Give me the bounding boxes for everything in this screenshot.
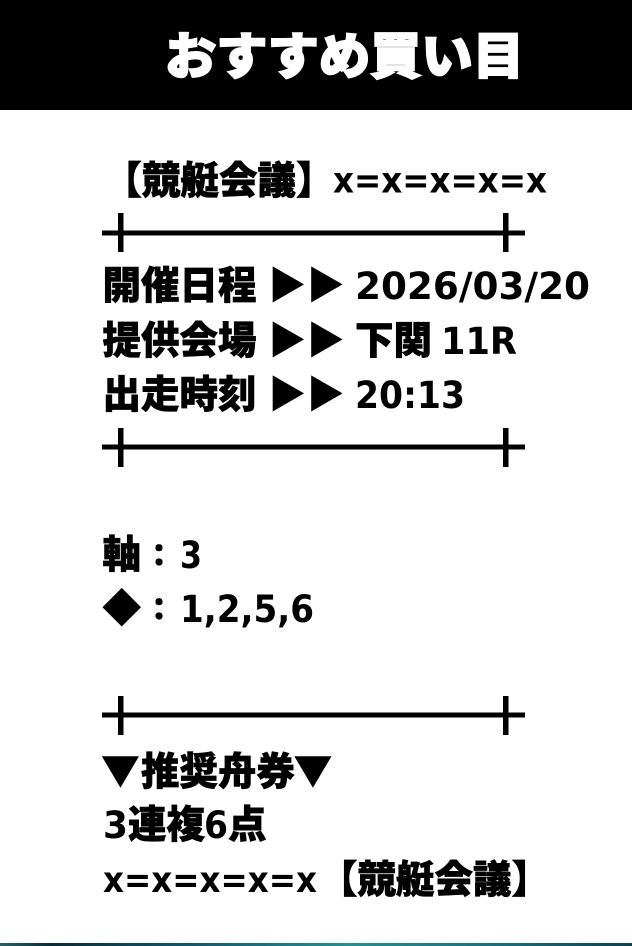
- divider 1: [102, 213, 525, 252]
- race date row: ▶▶: [268, 265, 345, 308]
- axis boat: ：: [144, 540, 174, 573]
- divider 2: [102, 428, 525, 467]
- venue row: 提供会場: [102, 320, 257, 363]
- partner boats: [102, 588, 314, 631]
- race date row: 開催日程: [102, 265, 257, 308]
- ticket count: 6: [204, 804, 228, 847]
- venue row: 11R: [441, 320, 517, 363]
- race date row: [102, 265, 590, 308]
- heading: brand line: x=x=x=x=x: [333, 160, 547, 202]
- partner boats: 1,2,5,6: [180, 588, 314, 631]
- ticket count: 点: [228, 804, 267, 847]
- heading: brand line: 【競艇会議】: [104, 160, 335, 203]
- footer brand line: [103, 859, 550, 902]
- start time row: ▶▶: [268, 374, 345, 417]
- recommended tickets heading: [89, 739, 344, 799]
- axis boat: 軸: [102, 534, 141, 577]
- recommended tickets heading: ▼: [89, 739, 152, 799]
- recommended tickets heading: ▼: [282, 739, 344, 799]
- ticket count: 連複: [128, 804, 206, 847]
- venue row: 下関: [355, 320, 432, 363]
- divider 3: [102, 696, 525, 735]
- start time row: 出走時刻: [102, 374, 257, 417]
- venue row: [102, 320, 517, 363]
- recommended tickets heading: 推奨舟券: [141, 751, 295, 794]
- header banner: [0, 0, 632, 110]
- ticket count: [103, 804, 267, 847]
- axis boat: 3: [180, 534, 202, 577]
- start time row: [102, 374, 465, 417]
- title: おすすめ買い目: [165, 29, 524, 85]
- venue row: ▶▶: [268, 320, 345, 363]
- partner boats: ：: [144, 594, 174, 627]
- bottom image strip: [0, 943, 632, 946]
- heading: brand line: [104, 160, 547, 203]
- race date row: 2026/03/20: [355, 265, 590, 308]
- ticket count: 3: [103, 804, 128, 847]
- partner boats: ◆: [102, 588, 142, 631]
- footer brand line: x=x=x=x=x: [103, 860, 317, 901]
- axis boat: [102, 534, 202, 577]
- start time row: 20:13: [355, 374, 465, 417]
- footer brand line: 【競艇会議】: [319, 859, 550, 902]
